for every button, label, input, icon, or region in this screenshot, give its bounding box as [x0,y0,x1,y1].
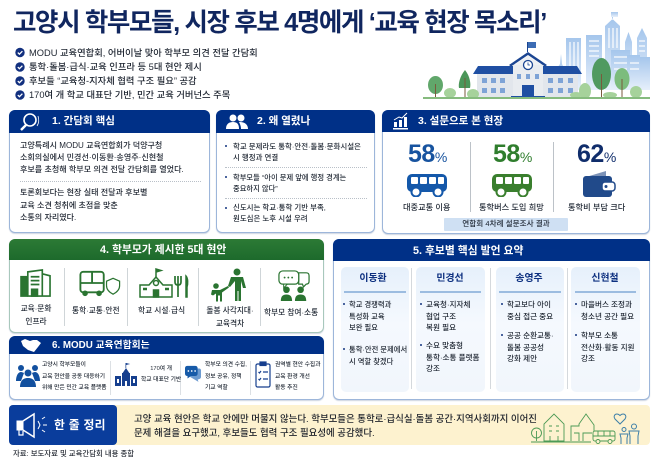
value 58%: 58% [408,140,447,168]
issue: commute safety [72,270,120,315]
text: 기교 역할 [205,385,228,391]
item: regional activity [254,357,322,397]
name: 이동환 [359,273,387,284]
intro paragraph: 고양특례시 MODU 교육연합회가 덕양구청 [20,141,162,150]
issue: care gaps [206,268,254,328]
label: 통학비 부담 크다 [568,203,625,212]
icon: group [16,365,40,387]
intro paragraph [20,141,184,174]
column: Shin Hyun-chul [571,267,640,392]
point 4: 170여 개 학교 대표단 기반, 민간 교육 거버넌스 주목 [29,90,230,100]
panel 5 header [333,239,650,261]
icon: school and cutlery [139,268,188,298]
icon: school [115,363,137,386]
remark 1 [581,299,634,322]
remark 1 [507,299,553,322]
intro paragraph: 후보를 초청해 학부모 의견 전달 간담회를 열었다. [20,165,184,174]
closing paragraph [20,188,147,222]
panel 5: candidate remarks [333,239,650,400]
bullet 2: 중요하지 않다” [233,184,278,193]
text: 위해 만든 민간 교육 플랫폼 [42,385,107,391]
text: 170여 개 [150,366,172,372]
label: 인프라 [25,316,47,326]
remark 2: 시 역할 찾겠다 [349,357,393,366]
panel 4 heading: 4. 학부모가 제시한 5대 현안 [100,244,226,256]
panel 1: meeting summary [9,110,210,233]
panel 4 header [9,239,324,260]
remark 1: 마을버스 조정과 [581,300,632,309]
remark 2: 강조 [581,354,595,363]
summary text: 고양 교육 현안은 학교 안에만 머물지 않는다. 학부모들은 통학로·급식실·돌봄 공간·지역사회까지 이어진 [134,414,537,425]
illustration: school and city skyline [423,12,650,99]
panel 3: survey results [382,110,650,234]
label: 교육격차 [216,318,244,328]
point 2: 통학·돌봄·급식·교육 인프라 등 5대 현안 제시 [29,62,202,72]
label: 대중교통 이용 [403,203,450,212]
summary text: 문제 해결을 요구했고, 후보들도 협력 구조 필요성에 공감했다. [134,428,375,438]
remark 2 [349,344,407,367]
icon: people [226,114,248,129]
value 62%: 62% [577,140,616,168]
icon: clipboard [255,361,271,388]
text: 활동 추진 [275,385,298,391]
remark 2: 통학·안전 문제에서 [349,345,407,354]
column: Min Kyung-sun [416,267,485,392]
label [20,304,52,326]
stat: public transport [403,140,450,212]
text [141,365,181,383]
bullet 1: 학교 문제라도 통학·안전·돌봄·문화시설은 [233,142,361,151]
text [42,361,107,391]
icon: wallet [583,171,616,197]
text: 권역별 현안 수집과 [275,362,321,368]
text: 고양시 학부모들이 [42,362,86,368]
remark 1: 학교 경쟁력과 [349,300,391,309]
icon: bus and shield [79,270,120,296]
point 3: 후보들 “교육청-지자체 협력 구조 필요” 공감 [29,76,197,86]
text: 학부모 의견 수집, [205,362,247,368]
icon: megaphone [16,412,48,439]
icon: handshake [21,339,41,352]
remark 1: 특성화 교육 [349,312,385,321]
remark 2 [581,330,635,365]
panel 2 header [216,110,375,133]
remark 1 [426,299,470,334]
value 58%: 58% [493,140,532,168]
survey source pill [444,218,568,231]
panel 3 header [382,110,650,132]
label: 학교 시설·급식 [138,306,185,315]
label: 돌봄 사각지대· [206,306,254,315]
label: 통학버스 도입 희망 [479,203,544,212]
stat: school bus [479,140,544,212]
panel 1 heading: 1. 간담회 핵심 [52,115,115,127]
icon: speech and people [278,270,310,301]
remark 2: 전산화·활동 지원 [581,343,635,352]
remark 1: 중심 접근 중요 [507,312,553,321]
summary label: 한 줄 정리 [54,418,106,432]
panel 6 header [9,336,324,354]
remark 1: 복원 필요 [426,323,456,332]
intro paragraph: 소회의실에서 민경선·이동환·송영주·신현철 [20,153,164,162]
text: 교육 환경 개선 [275,374,310,380]
one-line summary band [9,405,650,445]
panel 5 heading: 5. 후보별 핵심 발언 요약 [413,245,523,257]
closing paragraph: 소통의 자리였다. [20,213,76,222]
icon: bus [407,174,447,197]
remark 1: 보완 필요 [349,323,378,332]
issue: education culture infrastructure [20,269,52,326]
school [477,74,578,97]
issue: parent participation [264,270,318,317]
icon: speech bubbles [185,365,201,382]
icon: parent and child [211,268,246,302]
trees [444,83,642,99]
label: 교육·문화 [21,304,51,313]
closing paragraph: 교육 소견 청취에 초점을 맞춘 [20,200,118,210]
bullet 1 [225,142,361,162]
remark 1: 청소년 공간 필요 [581,312,634,321]
title: 고양시 학부모들, 시장 후보 4명에게 ‘교육 현장 목소리’ [13,9,546,37]
label: 통학·교통·안전 [72,306,120,315]
source note: 자료: 보도자료 및 교육간담회 내용 종합 [13,449,134,458]
text [205,360,247,394]
remark 2: 통학·소통 플랫폼 [426,353,480,362]
closing paragraph: 토론회보다는 현장 실태 전달과 후보별 [20,188,147,197]
text [275,360,321,394]
remark 2: 강조 [426,364,440,373]
icon: bus [492,174,532,197]
icon: chart [393,112,408,130]
label: 학부모 참여·소통 [264,308,318,317]
column: Lee Dong-hwan [341,267,409,392]
item: platform [16,361,107,391]
label [206,306,254,328]
bullet 1: 시 행정과 연결 [233,153,278,162]
remark 2: 돌봄 공공성 [507,343,544,352]
check icons [15,48,25,100]
panel 1 header [9,110,210,133]
summary label box [9,405,117,445]
item: schools [115,363,181,386]
remark 1 [349,299,391,334]
icon: magnifier [20,113,40,131]
key points list [15,48,258,100]
summary text [134,413,537,440]
stat: school cost [568,140,626,212]
survey source pill: 연합회 4차례 설문조사 결과 [462,219,550,228]
panel 2: why it was held [216,110,375,233]
remark 2 [507,330,554,365]
remark 1: 협업 구조 [426,312,456,321]
point 1: MODU 교육연합회, 어버이날 맞아 학부모 의견 전달 간담회 [29,48,258,58]
remark 1: 교육청·지자체 [426,300,470,309]
bullet 3: 신도시는 학교·통학 기반 부족, [233,203,326,212]
panel 6 heading: 6. MODU 교육연합회는 [52,340,150,351]
remark 2 [426,340,480,375]
panel 6: about MODU [9,336,324,400]
bullet 3: 원도심은 노후 시설 우려 [233,214,308,222]
panel 3 heading: 3. 설문으로 본 현장 [418,115,503,127]
bullet 2: 학부모들 “아이 문제 앞에 행정 경계는 [233,173,346,182]
column: Song Young-joo [496,267,564,392]
text: 정보 공유, 정책 [205,374,242,380]
bullet 3 [225,203,326,222]
item: opinions [185,361,247,391]
remark 2: 수요 맞춤형 [426,341,463,350]
bullet 2 [225,173,346,193]
illustration: houses, bus and family [531,413,641,445]
remark 2: 강화 제안 [507,354,537,363]
name: 신현철 [591,273,619,284]
icon: buildings and books [20,269,51,297]
panel 2 heading: 2. 왜 열렸나 [257,115,310,127]
text: 학교 대표단 기반 [141,377,181,383]
name: 민경선 [436,273,464,284]
remark 2: 학부모 소통 [581,331,618,340]
remark 1: 학교보다 아이 [507,300,551,309]
issue: school facilities and meals [138,268,188,315]
name: 송영주 [515,273,543,284]
remark 2: 공공 순환교통· [507,331,554,340]
panel 4: five issues [9,239,324,333]
text: 교육 현안을 공동 대응하기 [42,374,105,380]
